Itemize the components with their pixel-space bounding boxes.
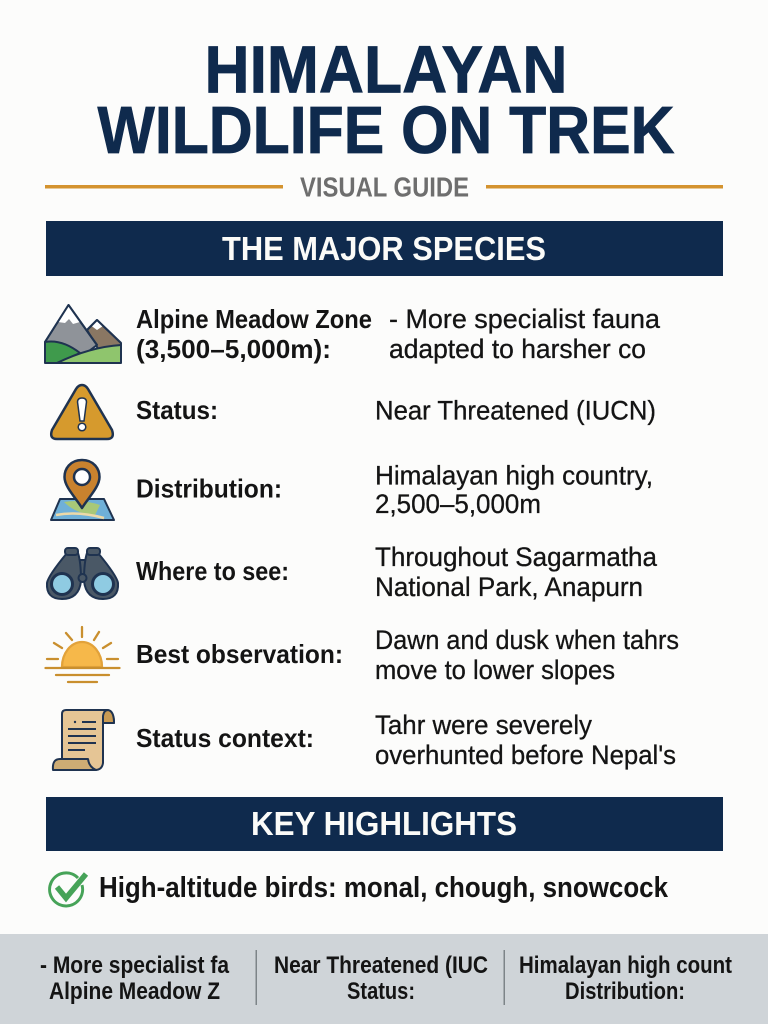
row: status bbox=[51, 385, 656, 439]
section banner: key highlights bbox=[46, 797, 723, 851]
row: distribution: Distribution: bbox=[136, 476, 282, 504]
section banner: the major species: THE MAJOR SPECIES bbox=[222, 231, 546, 268]
subtitle: visual guide with rules: VISUAL GUIDE bbox=[300, 172, 469, 202]
title: WILDLIFE ON TREK bbox=[98, 93, 674, 168]
row: best observation bbox=[46, 625, 679, 685]
icon: scroll bbox=[53, 710, 114, 770]
footer column 2: Status: bbox=[347, 978, 415, 1005]
row: best observation: Dawn and dusk when tahrs bbox=[375, 625, 679, 655]
row: status context: overhunted before Nepal's bbox=[375, 740, 676, 770]
icon: warning triangle bbox=[51, 385, 113, 439]
footer column 1 bbox=[40, 952, 230, 1005]
row: status context: Status context: bbox=[136, 725, 314, 753]
row: best observation: Best observation: bbox=[136, 641, 343, 669]
row: alpine meadow zone: adapted to harsher co bbox=[389, 334, 646, 364]
row: where to see: Throughout Sagarmatha bbox=[375, 542, 657, 572]
row: distribution bbox=[51, 460, 653, 520]
icon: binoculars bbox=[47, 548, 118, 599]
row: alpine meadow zone: - More specialist fauna bbox=[389, 304, 660, 334]
icon: sunrise bbox=[46, 627, 120, 682]
footer column 3: Distribution: bbox=[565, 978, 685, 1005]
section banner: the major species bbox=[46, 221, 723, 276]
icon: green check bbox=[50, 873, 86, 906]
row: alpine meadow zone: (3,500–5,000m): bbox=[136, 336, 331, 364]
title bbox=[98, 32, 674, 168]
footer column 3: Himalayan high count bbox=[519, 952, 732, 979]
row: alpine meadow zone bbox=[45, 304, 660, 364]
footer strip bbox=[0, 934, 768, 1024]
row: status context bbox=[53, 710, 676, 770]
icon: mountains bbox=[45, 305, 121, 363]
row: distribution: 2,500–5,000m bbox=[375, 489, 541, 519]
highlight: high-altitude birds: High-altitude birds: monal, chough, snowcock bbox=[99, 872, 669, 904]
icon: map pin bbox=[51, 460, 114, 520]
row: where to see: National Park, Anapurn bbox=[375, 572, 643, 602]
row: distribution: Himalayan high country, bbox=[375, 460, 653, 490]
row: alpine meadow zone: Alpine Meadow Zone bbox=[136, 306, 372, 334]
subtitle: visual guide with rules bbox=[45, 172, 723, 202]
row: status: Status: bbox=[136, 397, 218, 425]
row: best observation: move to lower slopes bbox=[375, 655, 615, 685]
title: HIMALAYAN bbox=[204, 32, 568, 108]
row: where to see: Where to see: bbox=[136, 558, 289, 586]
row: status context: Tahr were severely bbox=[375, 710, 593, 740]
section banner: key highlights: KEY HIGHLIGHTS bbox=[251, 806, 517, 843]
footer column 3 bbox=[519, 952, 732, 1005]
row: where to see bbox=[47, 542, 657, 602]
row: status: Near Threatened (IUCN) bbox=[375, 396, 656, 426]
footer column 2 bbox=[274, 952, 488, 1005]
footer column 1: - More specialist fa bbox=[40, 952, 230, 979]
footer column 2: Near Threatened (IUC bbox=[274, 952, 488, 979]
footer column 1: Alpine Meadow Z bbox=[49, 978, 220, 1005]
